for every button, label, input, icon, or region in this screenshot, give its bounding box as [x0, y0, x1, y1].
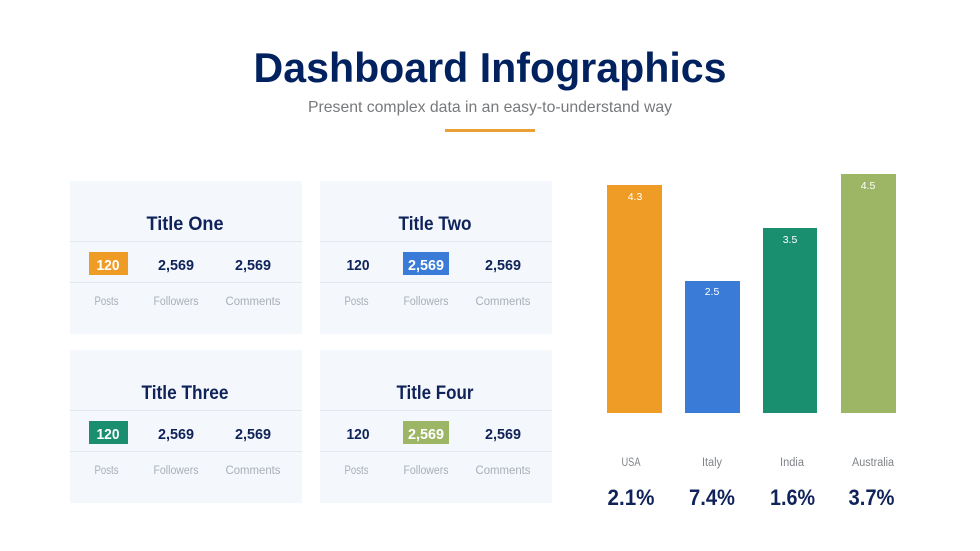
panel: title two: 2,569 — [408, 257, 444, 274]
bar: India: 3.5 — [783, 234, 797, 246]
panel: title two: 120 — [346, 257, 370, 274]
bar chart — [607, 174, 896, 413]
country stat: India: India — [780, 457, 805, 469]
bar: Australia — [841, 174, 896, 413]
bar: USA — [607, 185, 662, 413]
panel: title one: Comments — [226, 296, 281, 308]
country stat: India: 1.6% — [770, 485, 815, 510]
country stat: USA: USA — [622, 457, 641, 469]
country stat: Italy: Italy — [702, 457, 722, 469]
panel: title three: Followers — [154, 465, 199, 477]
title: Dashboard Infographics — [254, 44, 726, 91]
panel: title two — [320, 181, 552, 334]
country stat: Italy: 7.4% — [689, 485, 735, 510]
bar: Australia: 4.5 — [861, 180, 875, 192]
country stat: Australia — [848, 457, 895, 510]
panel: title four: Followers — [404, 465, 449, 477]
panel: title three: Posts — [94, 465, 119, 477]
panel: title two: Title Two — [398, 214, 472, 235]
panel: title two: Followers — [404, 296, 449, 308]
title accent underline — [445, 129, 535, 132]
panel: title four: 2,569 — [408, 426, 444, 443]
panel: title four: Title Four — [396, 383, 474, 404]
bar: Italy — [685, 281, 740, 413]
panel: title one: Followers — [154, 296, 199, 308]
country stat: India — [770, 457, 815, 510]
panel: title three: 120 — [96, 426, 120, 443]
panel: title four: Posts — [344, 465, 369, 477]
panel: title three: 2,569 — [235, 426, 271, 443]
panel: title four — [320, 350, 552, 503]
panel: title one: Posts — [94, 296, 119, 308]
panel: title four: 120 — [346, 426, 370, 443]
panel: title one: 120 — [96, 257, 120, 274]
panel: title two: Posts — [344, 296, 369, 308]
country stat: USA: 2.1% — [608, 485, 654, 510]
subtitle: Present complex data in an easy-to-understand way — [308, 99, 672, 116]
panel: title one: 2,569 — [158, 257, 194, 274]
panel: title three: Title Three — [142, 383, 228, 404]
country stat: USA — [608, 457, 654, 510]
panel: title two: 2,569 — [485, 257, 521, 274]
panel: title three — [70, 350, 302, 503]
country stat: Italy — [689, 457, 735, 510]
panel: title one: Title One — [146, 214, 224, 235]
panel: title two: Comments — [476, 296, 531, 308]
bar: India — [763, 228, 817, 413]
panel: title four: Comments — [476, 465, 531, 477]
country stat: Australia: Australia — [852, 457, 895, 469]
panel: title three: Comments — [226, 465, 281, 477]
bar: USA: 4.3 — [628, 191, 642, 203]
country stat: Australia: 3.7% — [848, 485, 894, 510]
panel: title three: 2,569 — [158, 426, 194, 443]
panel: title one — [70, 181, 302, 334]
panel: title four: 2,569 — [485, 426, 521, 443]
panel: title one: 2,569 — [235, 257, 271, 274]
bar: Italy: 2.5 — [705, 286, 719, 298]
